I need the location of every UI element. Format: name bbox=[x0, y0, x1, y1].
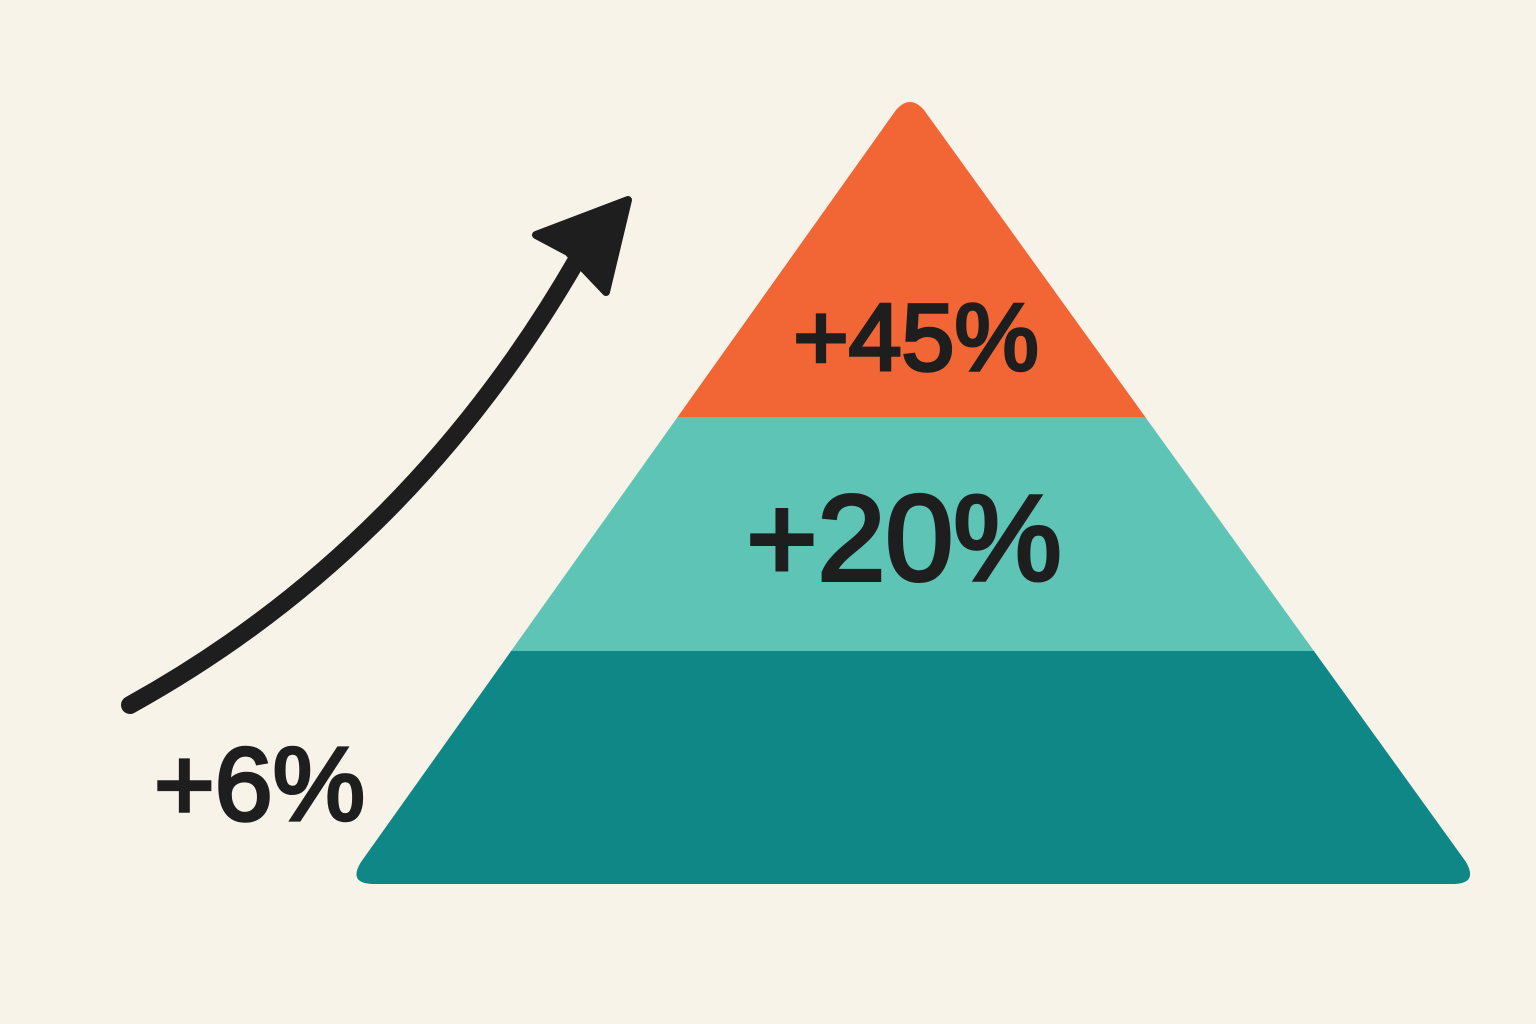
tier: top orange bbox=[677, 102, 1146, 418]
label: +6%: +6% bbox=[154, 727, 365, 843]
arrow: upward growth bbox=[130, 200, 628, 705]
tier: middle light teal bbox=[510, 417, 1315, 652]
label: +45%: +45% bbox=[793, 285, 1039, 391]
tier: bottom dark teal bbox=[340, 651, 1490, 891]
label: +20%: +20% bbox=[746, 470, 1062, 606]
pyramid chart bbox=[340, 90, 1490, 891]
